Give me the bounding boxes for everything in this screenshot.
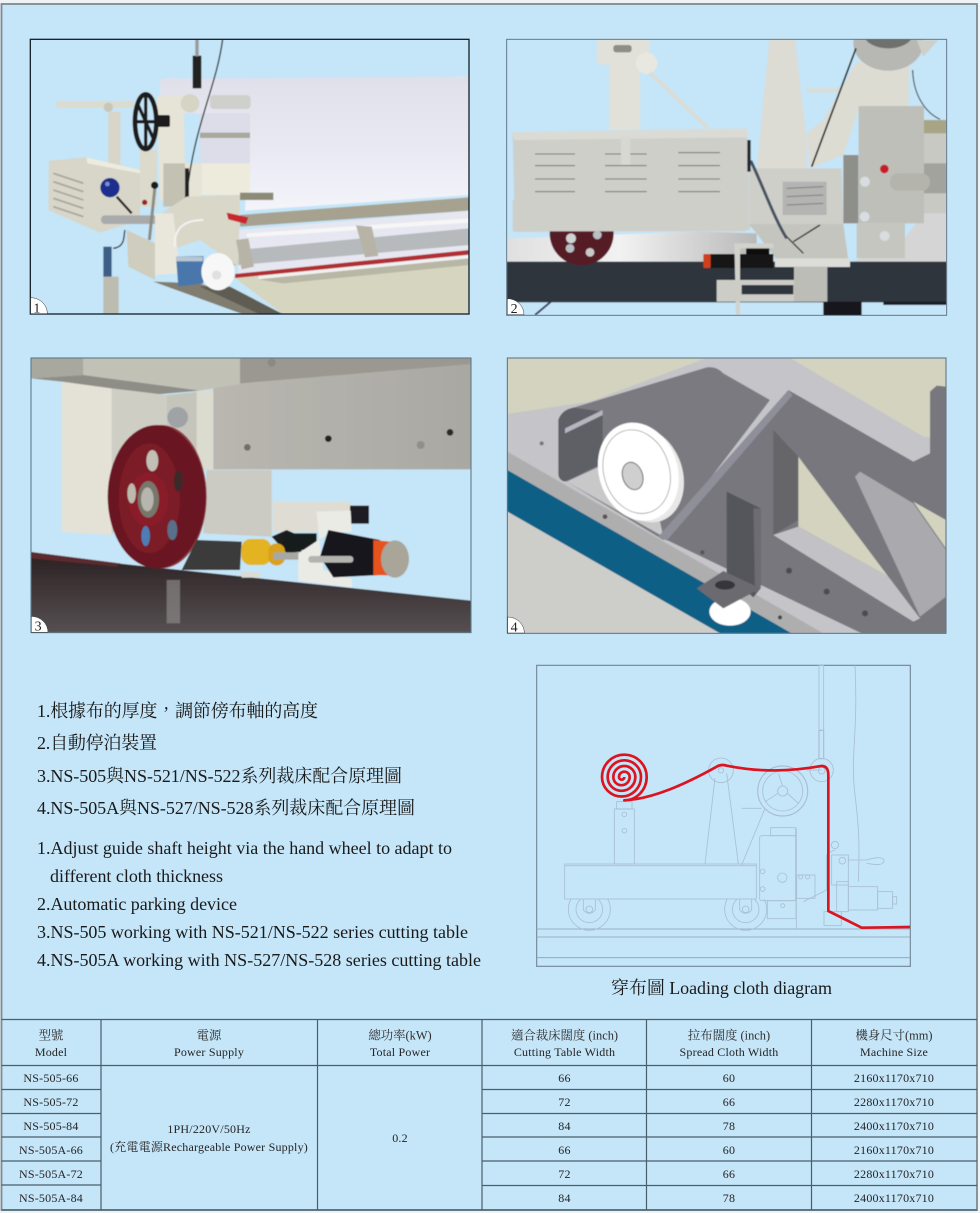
table header row: 機身尺寸(mm): [855, 1028, 933, 1042]
photo 4: CAD view of wheel bracket: [507, 358, 946, 636]
table header row: Spread Cloth Width: [680, 1045, 778, 1059]
badge 4: [508, 617, 524, 636]
machine size column: 2280x1170x710: [854, 1167, 934, 1181]
machine size column: 2160x1170x710: [854, 1143, 934, 1157]
Chinese feature list: [37, 700, 415, 818]
badge 1: [31, 298, 47, 317]
photo 1: spreader machine front view: [30, 39, 469, 317]
cutting table width column: [558, 1071, 571, 1205]
power supply cell: 1PH/220V/50Hz: [167, 1122, 251, 1136]
table header row: 適合裁床闊度 (inch): [511, 1028, 618, 1042]
English feature list: 4.NS-505A working with NS-527/NS-528 series cutting table: [37, 950, 481, 970]
Chinese feature list: 4.NS-505A與NS-527/NS-528系列裁床配合原理圖: [37, 798, 415, 818]
table header row: 電源: [197, 1028, 222, 1042]
Chinese feature list: 1.根據布的厚度，調節傍布軸的高度: [37, 700, 318, 721]
machine line drawing: [537, 665, 910, 958]
cutting table width column: 66: [558, 1071, 571, 1085]
model column: NS-505-66: [23, 1071, 79, 1085]
table header row: Total Power: [370, 1045, 430, 1059]
badge 1: 1: [33, 302, 40, 317]
model column: NS-505A-84: [19, 1191, 83, 1205]
model column: NS-505-84: [23, 1119, 79, 1133]
model column: NS-505A-66: [19, 1143, 83, 1157]
photo 2: control box side view: [507, 16, 947, 317]
Chinese feature list: 2.自動停泊裝置: [37, 733, 157, 753]
spread cloth width column: 66: [723, 1095, 735, 1109]
cutting table width column: 66: [558, 1143, 571, 1157]
spread cloth width column: [723, 1071, 735, 1205]
total power cell: 0.2: [392, 1131, 408, 1145]
loading cloth diagram: [537, 665, 910, 966]
table header row: Model: [35, 1045, 68, 1059]
table header row: Machine Size: [860, 1045, 928, 1059]
English feature list: [37, 838, 481, 970]
machine size column: 2160x1170x710: [854, 1071, 934, 1085]
badge 3: [31, 616, 48, 635]
cutting table width column: 84: [558, 1191, 571, 1205]
table header row: Cutting Table Width: [514, 1045, 615, 1059]
English feature list: different cloth thickness: [50, 866, 223, 886]
cutting table width column: 84: [558, 1119, 571, 1133]
model column: NS-505-72: [23, 1095, 79, 1109]
photo 3: parking wheel and sensor: [31, 358, 471, 635]
model column: [19, 1071, 83, 1205]
power supply cell: (充電電源Rechargeable Power Supply): [110, 1140, 308, 1154]
spread cloth width column: 66: [723, 1167, 735, 1181]
machine size column: 2400x1170x710: [854, 1191, 934, 1205]
specification table: [2, 1020, 977, 1210]
English feature list: 1.Adjust guide shaft height via the hand wheel to adapt to: [37, 838, 452, 858]
cutting table width column: 72: [558, 1167, 571, 1181]
table grid: [2, 1020, 977, 1210]
machine size column: [854, 1071, 934, 1205]
diagram caption: 穿布圖 Loading cloth diagram: [611, 978, 832, 998]
Chinese feature list: 3.NS-505與NS-521/NS-522系列裁床配合原理圖: [37, 766, 402, 786]
English feature list: 3.NS-505 working with NS-521/NS-522 series cutting table: [37, 922, 468, 942]
machine size column: 2400x1170x710: [854, 1119, 934, 1133]
spread cloth width column: 60: [723, 1071, 735, 1085]
power supply cell: [110, 1122, 308, 1154]
table header row: [35, 1028, 933, 1059]
table header row: 拉布闊度 (inch): [688, 1028, 770, 1042]
table header row: Power Supply: [174, 1045, 244, 1059]
badge 2: 2: [511, 302, 518, 317]
cloth path in red: [602, 755, 910, 928]
machine size column: 2280x1170x710: [854, 1095, 934, 1109]
badge 3: 3: [35, 620, 42, 635]
model column: NS-505A-72: [19, 1167, 83, 1181]
table header row: 總功率(kW): [368, 1028, 432, 1042]
table header row: 型號: [39, 1028, 63, 1042]
spread cloth width column: 78: [723, 1191, 735, 1205]
cutting table width column: 72: [558, 1095, 571, 1109]
badge 4: 4: [511, 621, 518, 636]
spread cloth width column: 78: [723, 1119, 735, 1133]
spread cloth width column: 60: [723, 1143, 735, 1157]
English feature list: 2.Automatic parking device: [37, 894, 237, 914]
badge 2: [507, 299, 524, 317]
